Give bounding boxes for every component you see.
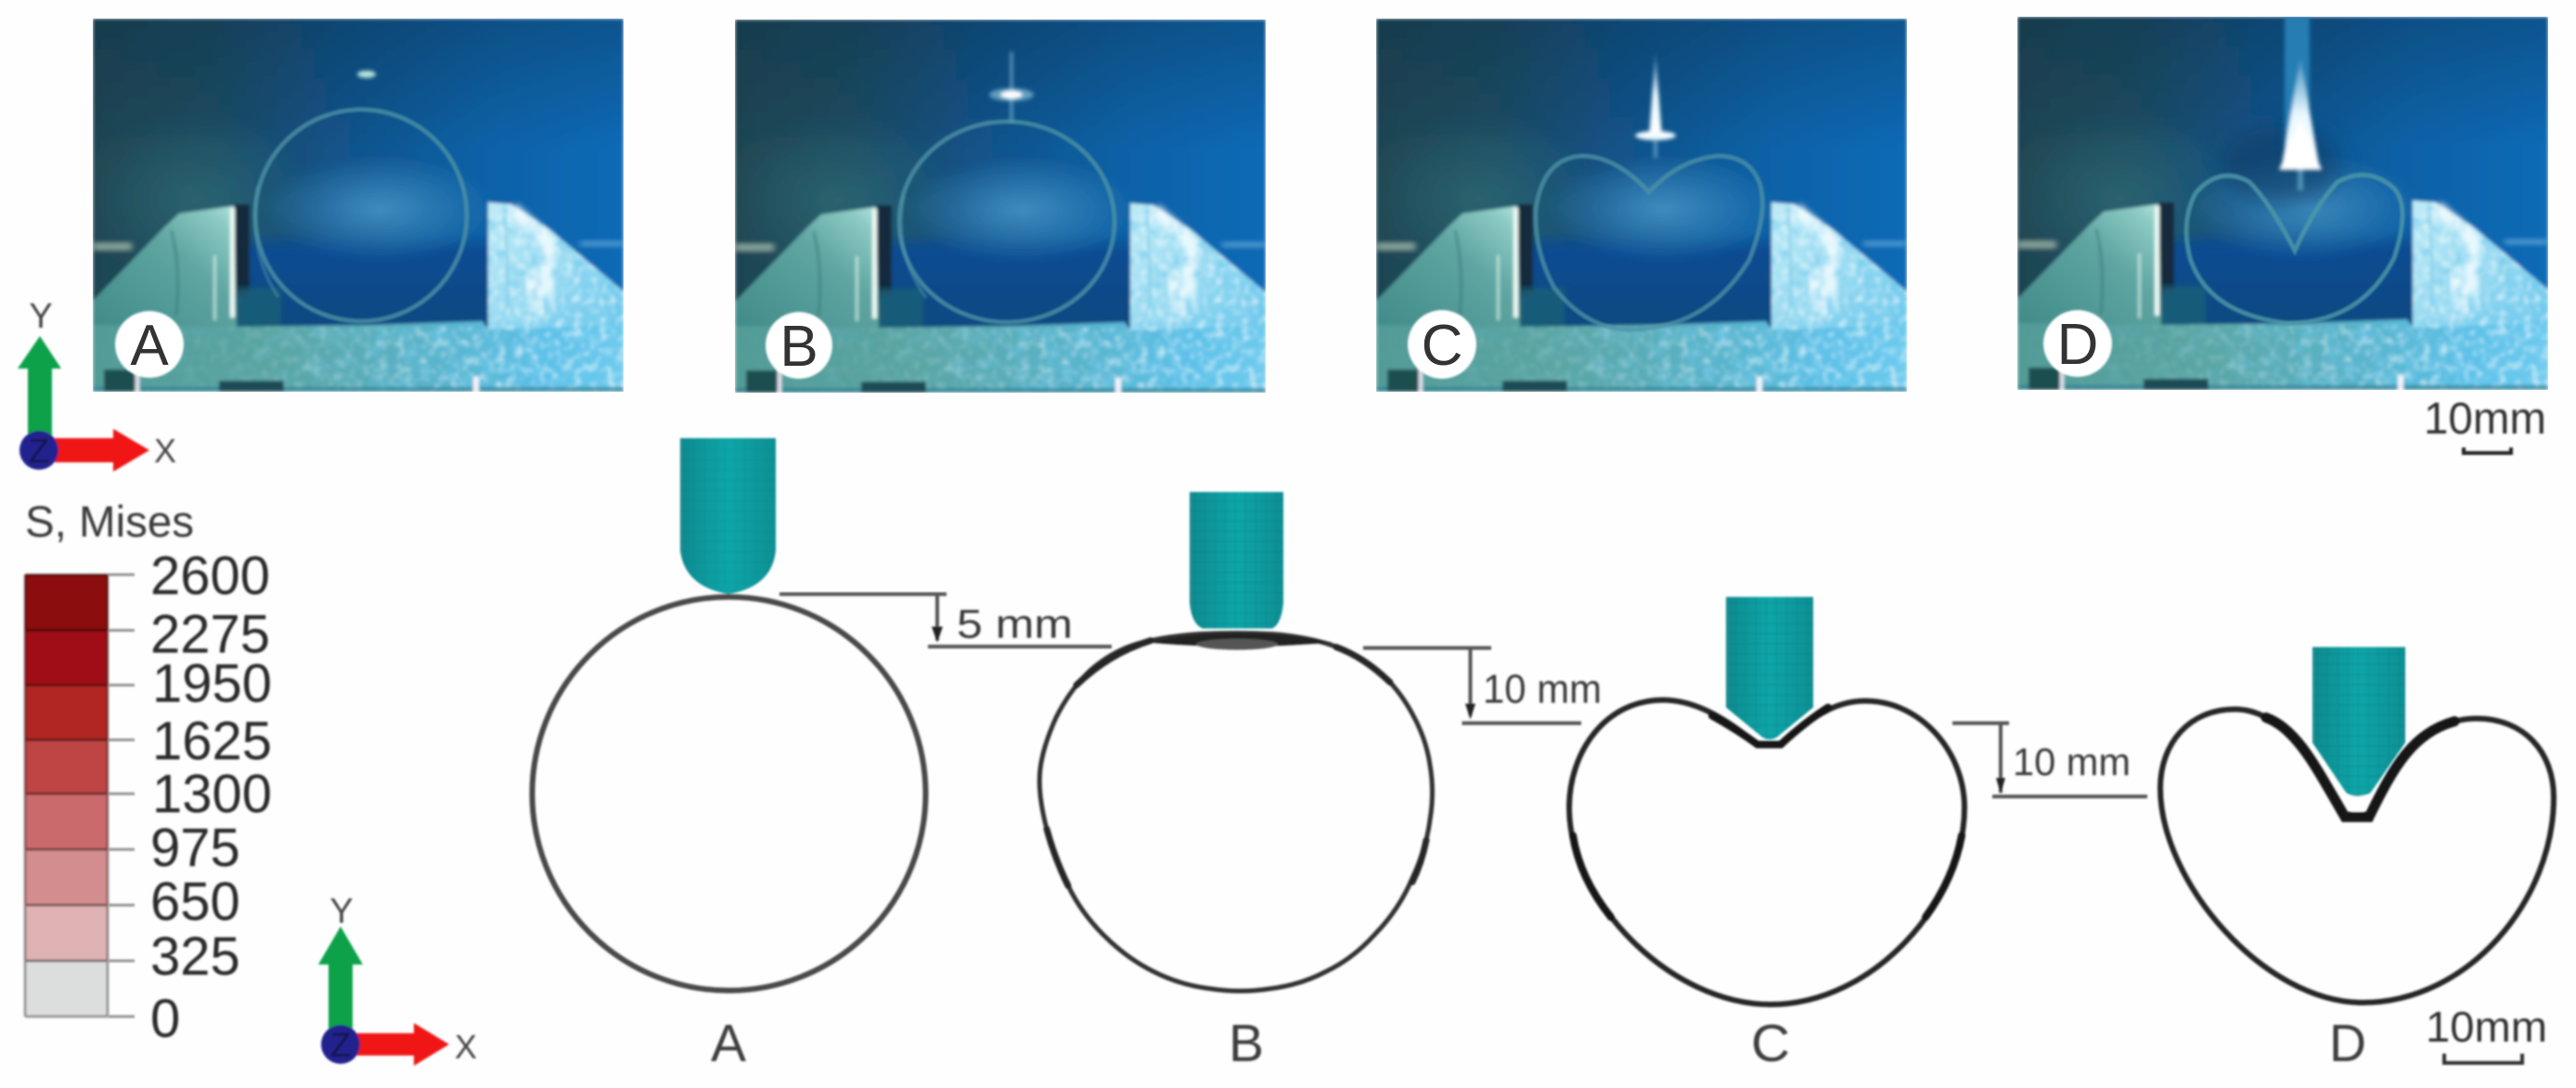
legend values: 325: [150, 926, 240, 987]
photo D indenter beam and flare: [2279, 17, 2322, 190]
dimension: 10 mm (C to D): 10 mm: [2013, 740, 2131, 784]
indenter C: [1726, 597, 1813, 739]
legend values: 0: [150, 989, 180, 1049]
legend title: S, Mises: [25, 497, 194, 546]
simulation stage B: [1039, 492, 1433, 1073]
legend values: 975: [150, 818, 240, 878]
dimension: 10 mm (B to C): [1363, 648, 1602, 723]
dimension: 5 mm: [779, 594, 1112, 647]
photo B label badge: B: [779, 315, 818, 379]
heart D thickened wall around indenter: [2266, 718, 2454, 817]
dimension: 10 mm (B to C): 10 mm: [1483, 667, 1602, 712]
photo B label badge: [766, 312, 832, 379]
legend colour bands: [25, 575, 135, 1017]
photo D dark shadow behind indenter: [2224, 126, 2339, 204]
simulation stage D: [2160, 647, 2554, 1073]
legend values: 2275: [150, 604, 270, 665]
dimension: 10 mm (C to D): [1952, 723, 2147, 797]
Z axis origin: [321, 1025, 360, 1064]
legend values: 1300: [152, 764, 272, 824]
photo A label badge: [115, 311, 184, 378]
X arrow: [39, 429, 149, 472]
photo D label badge: D: [2057, 313, 2098, 377]
indenter A: [680, 438, 776, 594]
panel: experiment photo B: [716, 19, 1266, 393]
photo A label badge: A: [130, 314, 169, 378]
label D: D: [2329, 1014, 2366, 1073]
panel: experiment photo A: [74, 19, 624, 392]
photo D label badge: [2043, 310, 2112, 377]
axis triad: bottom: [318, 892, 477, 1066]
legend values: [150, 546, 272, 1049]
X axis letter: X: [455, 1028, 477, 1066]
heart C thickened zones: [1573, 707, 1962, 917]
label B: B: [1229, 1014, 1264, 1073]
X arrow: [341, 1023, 449, 1066]
Y axis letter: Y: [29, 297, 53, 336]
axis triad: top left: [18, 297, 176, 472]
legend values: 1950: [152, 654, 272, 714]
photo D deep V specimen: [2186, 175, 2402, 323]
panel: experiment photo C: [1358, 19, 1907, 392]
legend values: 650: [150, 872, 240, 932]
Z axis origin: Z: [29, 432, 49, 470]
photo C label badge: C: [1422, 314, 1462, 378]
label A: A: [711, 1014, 746, 1073]
gap under indenter D: [2346, 796, 2369, 811]
scale bar: simulation: 10mm: [2426, 1003, 2547, 1051]
photo C heart-shaped specimen: [1536, 156, 1762, 330]
photo A indenter tip flare: [357, 71, 376, 78]
photo A ring specimen: [255, 110, 467, 321]
indenter B: [1190, 492, 1283, 628]
ring B outline: [1039, 633, 1433, 991]
simulation stage C: [1569, 597, 1964, 1073]
Z axis origin: Z: [330, 1026, 351, 1064]
ring A: [533, 597, 926, 991]
heart outline C: [1569, 700, 1964, 1004]
ring B thickened stressed zones: [1047, 633, 1426, 886]
heart outline D: [2160, 709, 2554, 1003]
Z axis origin: [19, 431, 58, 470]
legend: S, Mises stress scale: [25, 497, 272, 1049]
legend values: 1625: [152, 711, 272, 771]
photo C indenter flare: [1635, 51, 1676, 158]
label C: C: [1751, 1014, 1790, 1073]
photo B slightly flattened ring: [899, 122, 1114, 322]
indenter D: [2312, 647, 2405, 797]
photo C label badge: [1408, 310, 1476, 379]
legend values: 2600: [150, 546, 270, 606]
Y axis letter: Y: [329, 892, 354, 931]
scale bar: photos: 10mm: [2424, 395, 2546, 444]
dimension: 5 mm: 5 mm: [957, 602, 1073, 647]
panel: experiment photo D: [1999, 17, 2548, 390]
X axis letter: X: [154, 432, 176, 470]
photo B indenter flare: [989, 52, 1034, 122]
simulation stage A: [533, 438, 926, 1073]
Y arrow: [18, 336, 61, 450]
Y arrow: [318, 926, 363, 1044]
